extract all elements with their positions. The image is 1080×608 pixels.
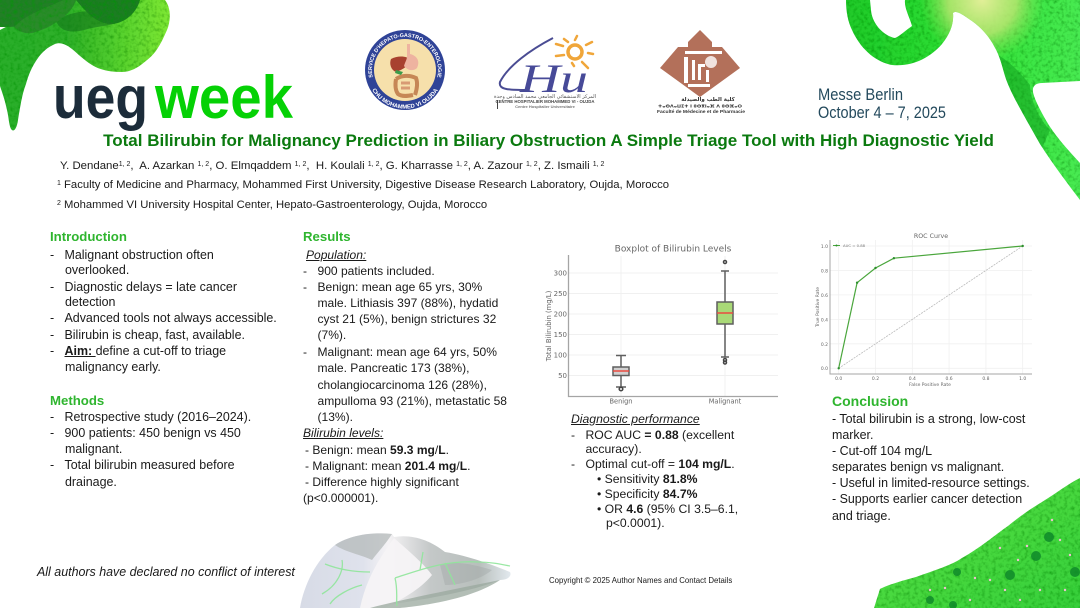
panel: methods: -	[50, 458, 54, 472]
venue and date: October 4 – 7, 2025	[818, 103, 946, 122]
panel: conclusion: Conclusion	[832, 393, 908, 409]
panel: results: -	[303, 264, 307, 278]
panel: results: - Difference highly significant	[305, 475, 459, 489]
panel: results: Bilirubin levels:	[303, 426, 383, 440]
logo: UEG Week	[53, 64, 294, 131]
panel: introduction: -	[50, 248, 54, 262]
venue and date: Messe Berlin	[818, 85, 903, 104]
logo: CHU Mohammed VI: Centre Hospitalier Universitaire	[515, 104, 576, 109]
logo: gastroenterology service roundel	[365, 30, 445, 110]
panel: diagnostic performance: -	[571, 428, 575, 442]
bottom-right green textured shape	[874, 478, 1080, 608]
panel: conclusion: and triage.	[832, 509, 891, 523]
panel: results: ampulloma 93 (21%), metastatic 58	[318, 394, 507, 408]
panel: methods: 900 patients: 450 benign vs 450	[64, 426, 241, 440]
panel: diagnostic performance	[571, 412, 738, 530]
panel: conclusion: marker.	[832, 428, 873, 442]
panel: diagnostic performance: ROC AUC = 0.88 (excellent	[586, 428, 734, 442]
panel: results: -	[303, 280, 307, 294]
panel: introduction: detection	[65, 295, 115, 309]
logo: gastroenterology service roundel: SERVICE D'HEPATO-GASTRO-ENTEROLOGIE	[368, 33, 442, 78]
panel: conclusion: - Cut-off 104 mg/L	[832, 444, 932, 458]
logo: Faculty of Medicine and Pharmacy: كلية الطب والصيدلة	[681, 96, 736, 103]
panel: diagnostic performance: -	[571, 457, 575, 471]
panel: diagnostic performance: accuracy).	[586, 442, 642, 456]
panel: conclusion: - Supports earlier cancer detection	[832, 492, 1022, 506]
panel: conclusion: - Useful in limited-resource settings.	[832, 476, 1030, 490]
panel: introduction	[50, 229, 277, 374]
panel: introduction: Bilirubin is cheap, fast, available.	[64, 328, 245, 342]
panel: results: (13%).	[318, 410, 353, 424]
authors: Y. Dendane1, 2, A. Azarkan 1, 2, O. Elmqaddem 1, 2, H. Koulali 1, 2, G. Kharrasse 1, 2, A. Zazour 1, 2, Z. Ismaili 1, 2	[60, 160, 604, 172]
panel: conclusion: separates benign vs malignant.	[832, 460, 1004, 474]
panel: methods: drainage.	[65, 475, 117, 489]
ROC curve chart: True Positive Rate	[815, 287, 821, 328]
panel: results: male. Lithiasis 397 (88%), hydatid	[318, 296, 498, 310]
panel: introduction: overlooked.	[65, 263, 129, 277]
boxplot chart: Malignant	[709, 398, 742, 406]
panel: diagnostic performance: • Specificity 84.7%	[597, 487, 697, 501]
copyright: Copyright © 2025 Author Names and Contact Details	[549, 576, 732, 585]
boxplot chart: 100	[554, 352, 567, 360]
ROC curve chart: 0.6	[946, 376, 953, 382]
ROC curve chart: AUC = 0.88	[843, 243, 866, 248]
panel: diagnostic performance: p<0.0001).	[606, 516, 665, 530]
panel: methods: -	[50, 426, 54, 440]
panel: results: Population:	[306, 248, 366, 262]
panel: introduction: malignancy early.	[65, 360, 161, 374]
panel: introduction: Introduction	[50, 229, 127, 244]
top-left green organic shape	[0, 0, 170, 131]
panel: results: (7%).	[318, 328, 346, 342]
panel: results: Results	[303, 229, 351, 244]
affiliation 2: 2 Mohammed VI University Hospital Center, Hepato-Gastroenterology, Oujda, Morocco	[57, 199, 487, 211]
logo: Faculty of Medicine and Pharmacy: Faculté de Médecine et de Pharmacie	[657, 109, 746, 114]
boxplot chart: Benign	[610, 398, 632, 406]
ROC curve chart: ROC Curve	[914, 233, 948, 240]
panel: methods	[50, 393, 251, 489]
panel: diagnostic performance: Diagnostic performance	[571, 412, 700, 426]
panel: introduction: -	[50, 280, 54, 294]
panel: diagnostic performance: Optimal cut-off = 104 mg/L.	[586, 457, 735, 471]
panel: introduction: -	[50, 344, 54, 358]
ROC curve chart: 0.2	[872, 376, 879, 382]
panel: introduction: Aim: define a cut-off to triage	[64, 344, 226, 358]
panel: results: male. Pancreatic 173 (38%),	[318, 361, 470, 375]
panel: methods: Methods	[50, 393, 104, 408]
panel: results: 900 patients included.	[318, 264, 435, 278]
logo: CHU Mohammed VI: CENTRE HOSPITALIER MOHAMMED VI - OUJDA	[496, 99, 594, 104]
logo: CHU Mohammed VI	[494, 36, 596, 109]
ROC curve chart: False Positive Rate	[909, 382, 951, 388]
boxplot chart: 50	[558, 372, 567, 380]
boxplot chart	[545, 244, 778, 406]
logo: gastroenterology service roundel: CHU MOHAMMED VI OUJDA	[372, 88, 438, 109]
panel: results: Benign: mean age 65 yrs, 30%	[318, 280, 482, 294]
title: Total Bilirubin for Malignancy Prediction in Biliary Obstruction A Simple Triage Tool with High Diagnostic Yield	[103, 131, 994, 150]
panel: results: cyst 21 (5%), benign strictures 32	[318, 312, 496, 326]
panel: diagnostic performance: • Sensitivity 81.8%	[597, 472, 697, 486]
panel: introduction: Malignant obstruction often	[64, 248, 214, 262]
panel: introduction: Diagnostic delays = late cancer	[64, 280, 237, 294]
ROC curve chart: 0.6	[821, 293, 828, 299]
panel: methods: -	[50, 410, 54, 424]
liver illustration	[300, 533, 511, 608]
logo: CHU Mohammed VI: Hu	[519, 56, 588, 101]
panel: results: - Benign: mean 59.3 mg/L.	[305, 443, 449, 457]
logo: Faculty of Medicine and Pharmacy	[657, 30, 746, 114]
panel: introduction: -	[50, 311, 54, 325]
panel: introduction: Advanced tools not always accessible.	[64, 311, 277, 325]
panel: conclusion: - Total bilirubin is a strong, low-cost	[832, 412, 1025, 426]
top-right green hook shape	[840, 0, 1080, 205]
ROC curve chart	[815, 233, 1032, 388]
logo: CHU Mohammed VI: المركز الاستشفائي الجامعي محمد السادس وجدة	[494, 94, 596, 100]
boxplot chart: Boxplot of Bilirubin Levels	[615, 244, 732, 254]
ROC curve chart: 0.0	[821, 366, 828, 372]
ROC curve chart: 0.4	[909, 376, 916, 382]
ROC curve chart: 0.4	[821, 317, 828, 323]
logo: UEG Week: ueg	[53, 64, 148, 131]
panel: results: Malignant: mean age 64 yrs, 50%	[318, 345, 497, 359]
boxplot chart: 250	[554, 290, 567, 298]
panel: methods: malignant.	[65, 442, 122, 456]
venue and date	[818, 85, 946, 122]
panel: methods: Total bilirubin measured before	[64, 458, 235, 472]
affiliation 1: 1 Faculty of Medicine and Pharmacy, Mohammed First University, Digestive Disease Research Laboratory, Oujda, Morocco	[57, 179, 669, 191]
ROC curve chart: 0.2	[821, 342, 828, 348]
panel: results: -	[303, 345, 307, 359]
panel: introduction: -	[50, 328, 54, 342]
panel: diagnostic performance: • OR 4.6 (95% CI 3.5–6.1,	[597, 502, 738, 516]
panel: conclusion	[832, 393, 1030, 523]
boxplot chart: Total Bilirubin (mg/L)	[545, 290, 553, 362]
boxplot chart: 200	[554, 310, 567, 318]
conflict of interest statement: All authors have declared no conflict of interest	[37, 565, 295, 579]
logo: Faculty of Medicine and Pharmacy: ⵜⴰⵙⴷⴰⵡⵉⵜ ⵏ ⵓⵙⴳⵏⴰⴼ ⴷ ⵓⵙⴼⴰⵔ	[658, 104, 742, 108]
ROC curve chart: 0.8	[982, 376, 990, 382]
panel: results: - Malignant: mean 201.4 mg/L.	[305, 459, 470, 473]
panel: methods: Retrospective study (2016–2024).	[64, 410, 251, 424]
panel: results: (p<0.000001).	[303, 491, 378, 505]
ROC curve chart: 1.0	[1019, 376, 1026, 382]
panel: results	[303, 229, 507, 505]
ROC curve chart: 0.0	[835, 376, 842, 382]
ROC curve chart: 0.8	[821, 268, 828, 274]
ROC curve chart: 1.0	[821, 244, 828, 250]
logo: UEG Week: week	[154, 64, 294, 131]
panel: results: cholangiocarcinoma 126 (28%),	[318, 378, 487, 392]
boxplot chart: 300	[554, 270, 567, 278]
boxplot chart: 150	[554, 331, 567, 339]
